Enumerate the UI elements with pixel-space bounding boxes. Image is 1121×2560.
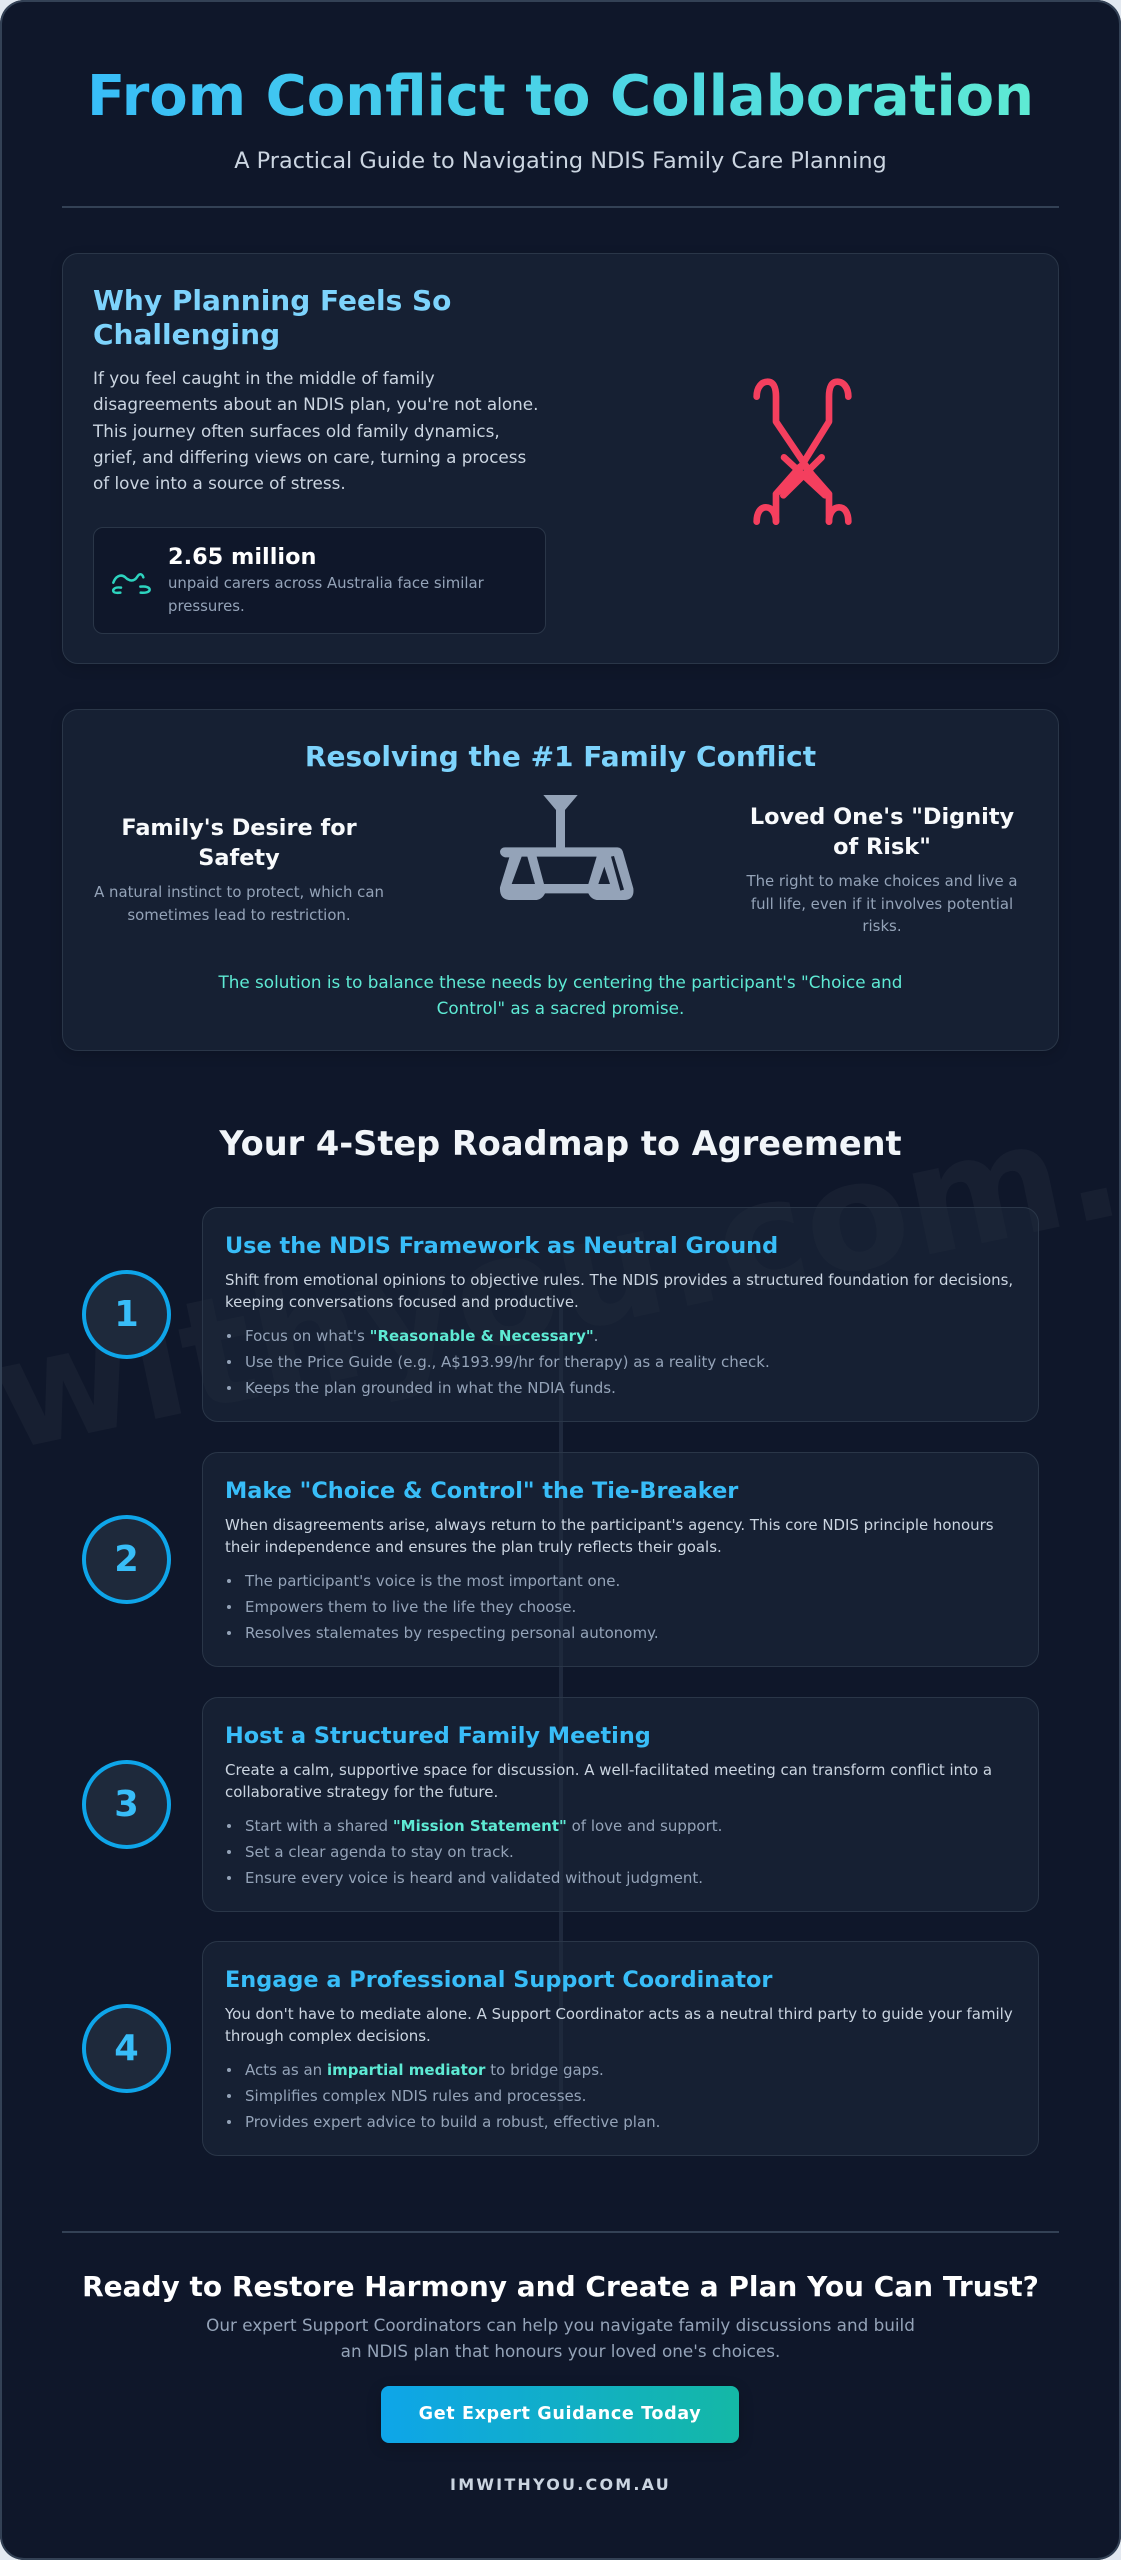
step bullets: [227, 1327, 770, 1397]
column heading: Loved One's "Dignity: [750, 804, 1014, 830]
section heading: roadmap: Your 4-Step Roadmap to Agreement: [219, 1124, 902, 1163]
step description: their independence and ensures the plan truly reflects their goals.: [225, 1538, 722, 1556]
heading: Challenging: [93, 318, 280, 351]
call to action text: [206, 2315, 915, 2361]
call to action text: Our expert Support Coordinators can help you navigate family discussions and build: [206, 2315, 915, 2335]
text block: of love into a source of stress.: [93, 473, 346, 493]
step bullets: Resolves stalemates by respecting personal autonomy.: [245, 1624, 659, 1642]
step description: Create a calm, supportive space for discussion. A well-facilitated meeting can transform conflict into a: [225, 1761, 992, 1779]
column heading: Safety: [198, 845, 280, 871]
callout: statistic: [93, 527, 546, 634]
column text: [746, 872, 1018, 935]
column text: A natural instinct to protect, which can: [94, 883, 384, 901]
button: [381, 2386, 739, 2443]
icon: connected people: [112, 573, 151, 594]
step description: keeping conversations focused and productive.: [225, 1293, 579, 1311]
column: family safety: [94, 815, 384, 924]
column: dignity of risk: [746, 804, 1018, 935]
step number: 4: [114, 2028, 139, 2069]
step description: [225, 1271, 1013, 1311]
step bullets: [227, 1572, 659, 1642]
text block: If you feel caught in the middle of family: [93, 368, 435, 388]
step bullets: Set a clear agenda to stay on track.: [245, 1843, 514, 1861]
call to action text: an NDIS plan that honours your loved one's choices.: [341, 2341, 780, 2361]
icon: crossed arrows conflict: [753, 378, 852, 525]
column heading: of Risk": [833, 834, 931, 860]
step card: [202, 1452, 1039, 1667]
step number: 1: [114, 1294, 139, 1335]
step bullets: Empowers them to live the life they choose.: [245, 1598, 576, 1616]
step 4: [82, 1941, 1039, 2156]
step 3: [82, 1697, 1039, 1912]
column text: sometimes lead to restriction.: [127, 906, 351, 924]
column text: [94, 883, 384, 924]
step bullets: Keeps the plan grounded in what the NDIA funds.: [245, 1379, 616, 1397]
step title: Engage a Professional Support Coordinator: [225, 1967, 772, 1993]
solution statement: [218, 972, 902, 1018]
column text: full life, even if it involves potential: [751, 895, 1013, 913]
step description: When disagreements arise, always return to the participant's agency. This core NDIS principle honours: [225, 1516, 994, 1534]
subtitle: A Practical Guide to Navigating NDIS Family Care Planning: [234, 148, 887, 174]
stat caption: unpaid carers across Australia face similar: [168, 574, 484, 592]
step bullets: Provides expert advice to build a robust, effective plan.: [245, 2113, 660, 2131]
step bullets: Acts as an impartial mediator to bridge gaps.: [245, 2061, 604, 2079]
text block: disagreements about an NDIS plan, you're not alone.: [93, 394, 538, 414]
title: From Conflict to Collaboration: [87, 64, 1034, 129]
step description: Shift from emotional opinions to objective rules. The NDIS provides a structured foundation for decisions,: [225, 1271, 1013, 1289]
text block: This journey often surfaces old family dynamics,: [93, 421, 500, 441]
column text: risks.: [862, 917, 902, 935]
website: IMWITHYOU.COM.AU: [450, 2475, 671, 2494]
column text: The right to make choices and live a: [746, 872, 1018, 890]
call to action heading: Ready to Restore Harmony and Create a Plan You Can Trust?: [82, 2270, 1039, 2303]
step bullets: Simplifies complex NDIS rules and processes.: [245, 2087, 586, 2105]
step title: Make "Choice & Control" the Tie-Breaker: [225, 1478, 738, 1504]
step number: [82, 1270, 171, 1359]
step card: [202, 1697, 1039, 1912]
step description: [225, 2005, 1013, 2045]
text block: grief, and differing views on care, turning a process: [93, 447, 526, 467]
heading: [93, 284, 451, 351]
step bullets: Start with a shared "Mission Statement" of love and support.: [245, 1817, 722, 1835]
heading: Resolving the #1 Family Conflict: [305, 740, 816, 773]
step description: collaborative strategy for the future.: [225, 1783, 498, 1801]
solution statement: Control" as a sacred promise.: [437, 998, 684, 1018]
stat number: 2.65 million: [168, 544, 316, 570]
stat caption: pressures.: [168, 597, 245, 615]
text block: [92, 368, 538, 493]
step bullets: Ensure every voice is heard and validated without judgment.: [245, 1869, 703, 1887]
step description: [225, 1516, 994, 1556]
step description: [225, 1761, 992, 1801]
step card: [202, 1207, 1039, 1422]
step card: [202, 1941, 1039, 2156]
heading: Why Planning Feels So: [93, 284, 451, 317]
stat caption: [168, 574, 484, 615]
panel: why planning feels so challenging: [62, 253, 1059, 664]
column heading: Family's Desire for: [121, 815, 357, 841]
solution statement: The solution is to balance these needs by centering the participant's "Choice and: [219, 972, 902, 992]
step number: 2: [114, 1539, 139, 1580]
step bullets: [227, 1817, 722, 1887]
step title: Use the NDIS Framework as Neutral Ground: [225, 1233, 778, 1259]
step bullets: The participant's voice is the most important one.: [245, 1572, 620, 1590]
column heading: [121, 815, 357, 871]
column heading: [750, 804, 1014, 860]
timeline connector: [559, 1300, 563, 2110]
step description: You don't have to mediate alone. A Support Coordinator acts as a neutral third party to guide your family: [225, 2005, 1013, 2023]
step 1: [82, 1207, 1039, 1422]
step bullets: [227, 2061, 660, 2131]
step number: [82, 1760, 171, 1849]
step title: Host a Structured Family Meeting: [225, 1723, 651, 1749]
step number: [82, 1515, 171, 1604]
button: Get Expert Guidance Today: [419, 2404, 701, 2424]
step number: 3: [114, 1784, 139, 1825]
step 2: [82, 1452, 1039, 1667]
step bullets: Use the Price Guide (e.g., A$193.99/hr for therapy) as a reality check.: [245, 1353, 770, 1371]
step number: [82, 2004, 171, 2093]
step description: through complex decisions.: [225, 2027, 431, 2045]
step bullets: Focus on what's "Reasonable & Necessary".: [245, 1327, 598, 1345]
icon: balance scale: [500, 795, 634, 900]
panel: resolving the #1 family conflict: [62, 709, 1059, 1051]
